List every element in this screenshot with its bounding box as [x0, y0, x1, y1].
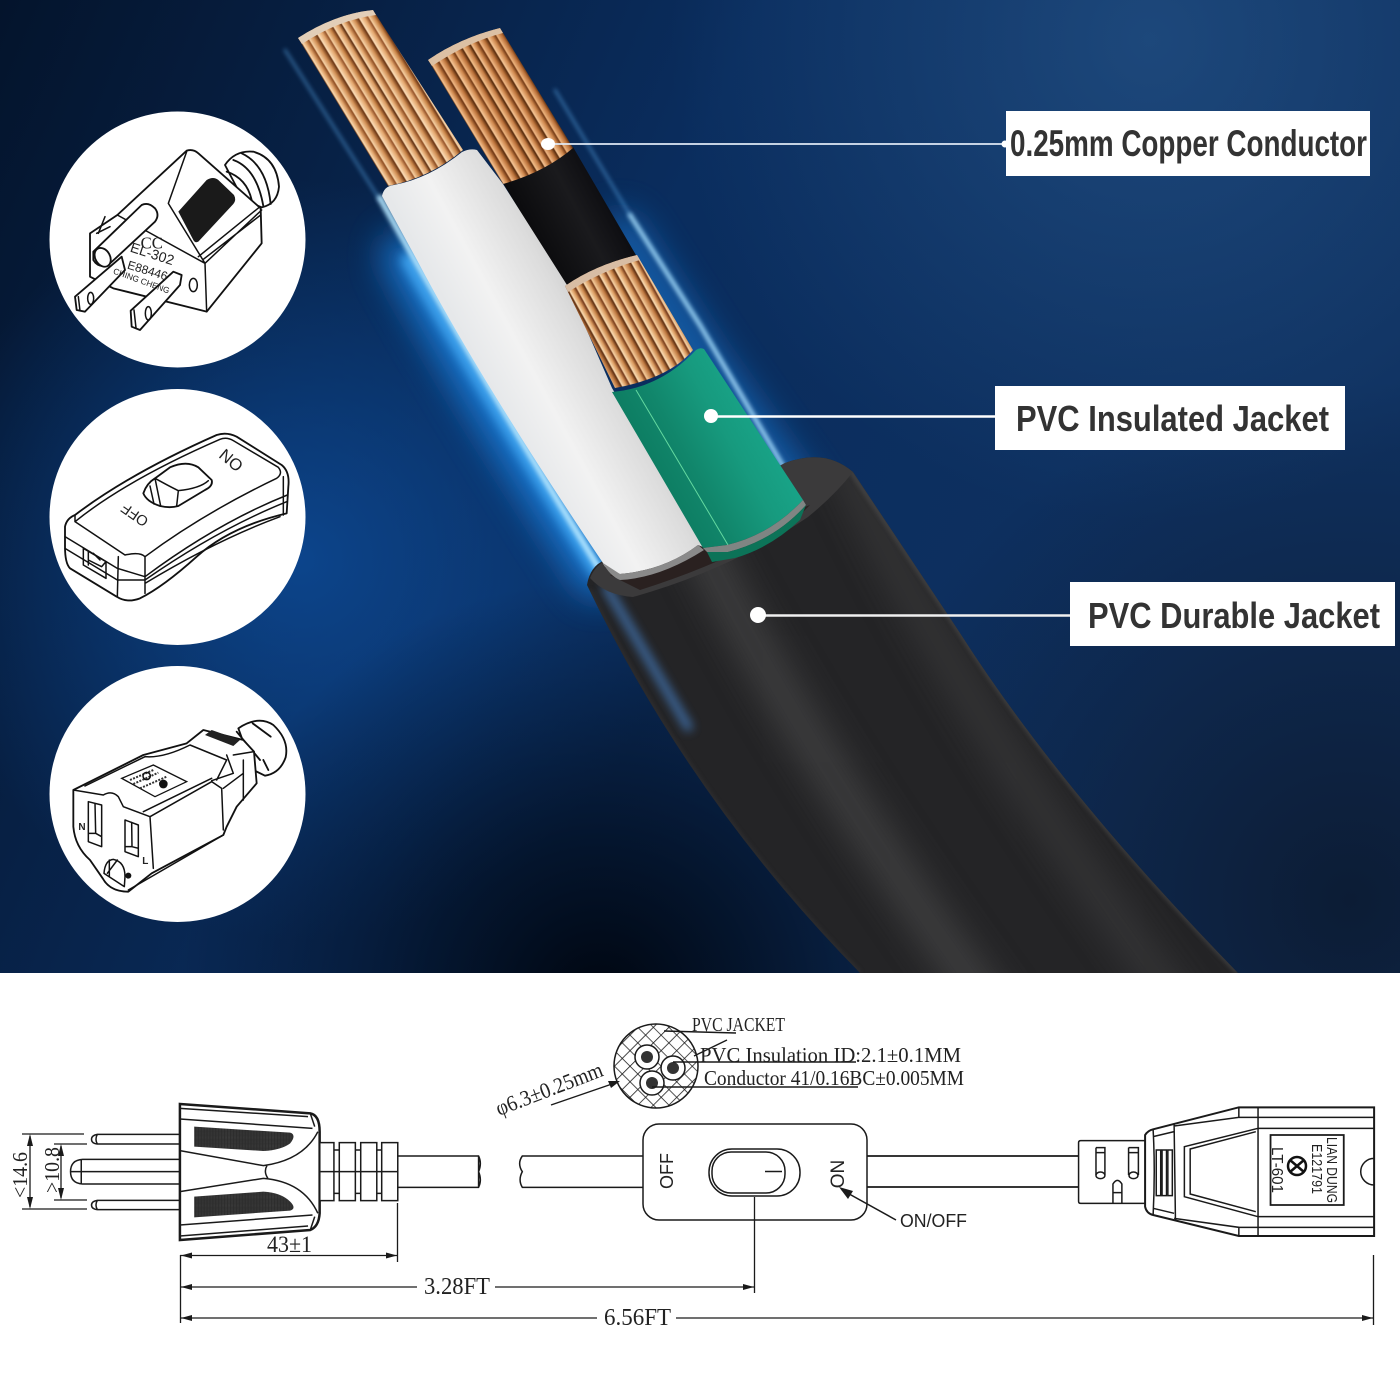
strain relief	[321, 1143, 398, 1201]
dimension: plug length 43: 43±1	[267, 1232, 312, 1257]
inline switch	[643, 1124, 867, 1220]
green insulated core	[612, 348, 803, 548]
dimension: 3.28FT: 3.28FT	[424, 1274, 490, 1300]
icon circle: socket	[50, 666, 306, 922]
white insulated core	[382, 149, 703, 574]
N mark: N	[78, 822, 86, 833]
drawing: connector	[1079, 1107, 1374, 1236]
dimensions panel	[0, 973, 1400, 1400]
grip	[178, 178, 235, 242]
dimension: 3.28FT	[181, 1197, 754, 1300]
callout: insulated jacket: PVC Insulated Jacket	[1016, 398, 1329, 439]
cable cross-section	[614, 1024, 698, 1108]
L mark: L	[142, 856, 148, 867]
ON/OFF pointer: ON/OFF	[900, 1211, 967, 1231]
light glow along the wires	[285, 50, 810, 575]
dimension: 6.56FT	[181, 1255, 1374, 1331]
cert logo	[1288, 1157, 1306, 1175]
dimension: pin width 14.6: <14.6	[8, 1152, 32, 1198]
cord to connector	[867, 1156, 1079, 1187]
rocker	[143, 464, 212, 507]
jacket cut face	[590, 457, 853, 597]
dimension: pin width 14.6	[8, 1134, 87, 1209]
cable: outer jacket rear and conductors	[298, 10, 1238, 1020]
outlets	[88, 802, 102, 847]
label plate	[122, 765, 187, 797]
cross-section leaders	[551, 1031, 858, 1105]
text: diameter: φ6.3±0.25mm	[492, 1057, 606, 1121]
outer jacket body	[587, 457, 1238, 973]
dimension: 6.56FT: 6.56FT	[604, 1305, 671, 1331]
copper conductor one	[298, 10, 463, 186]
dimension: pin width 10.8: >10.8	[40, 1147, 64, 1193]
blades	[75, 257, 125, 312]
label plate	[1271, 1135, 1344, 1205]
dimension: pin width 10.8	[40, 1144, 87, 1200]
ON mark: ON	[828, 1160, 849, 1188]
text: PVC insulation: PVC Insulation ID:2.1±0.1MM	[700, 1043, 961, 1067]
label: LT-601: LT-601	[1268, 1147, 1285, 1193]
text: conductor: Conductor 41/0.16BC±0.005MM	[704, 1066, 964, 1090]
cord end	[237, 721, 286, 776]
ON/OFF pointer	[839, 1187, 967, 1231]
imprint text: CC	[141, 234, 163, 253]
copper conductor three	[565, 255, 693, 388]
cord left stub	[397, 1156, 480, 1187]
icon circle: plug: EL-302	[128, 239, 176, 268]
black insulated core	[503, 147, 640, 290]
dark blue background panel	[0, 0, 1400, 973]
ground pin	[93, 204, 157, 266]
label: LIAN DUNG: LIAN DUNG	[1323, 1137, 1340, 1203]
callout: conductor	[541, 111, 1370, 176]
OFF mark: OFF	[657, 1153, 677, 1189]
connector window	[83, 548, 106, 578]
OFF label: OFF	[119, 499, 152, 529]
vents	[1156, 1150, 1172, 1196]
dimension: plug length 43	[180, 1203, 398, 1323]
cord end	[225, 151, 279, 207]
drawing: plug side view	[71, 1104, 643, 1240]
jacket shading	[597, 472, 1238, 973]
rocker	[709, 1149, 800, 1196]
callout: insulated jacket	[704, 386, 1345, 450]
icon circle: plug: CHING CHENG	[112, 266, 171, 295]
icon circle: plug	[50, 112, 306, 368]
label: E121791: E121791	[1308, 1144, 1325, 1194]
grip hatching	[194, 1127, 294, 1217]
icon circle: plug: E88446	[126, 258, 170, 283]
text: PVC jacket: PVC JACKET	[692, 1014, 785, 1036]
grip	[205, 730, 240, 746]
plug pins	[71, 1134, 180, 1210]
callout: durable jacket	[750, 582, 1395, 646]
icon circle: switch	[50, 389, 306, 645]
ON label: ON	[216, 445, 247, 475]
copper conductor two	[428, 28, 573, 184]
